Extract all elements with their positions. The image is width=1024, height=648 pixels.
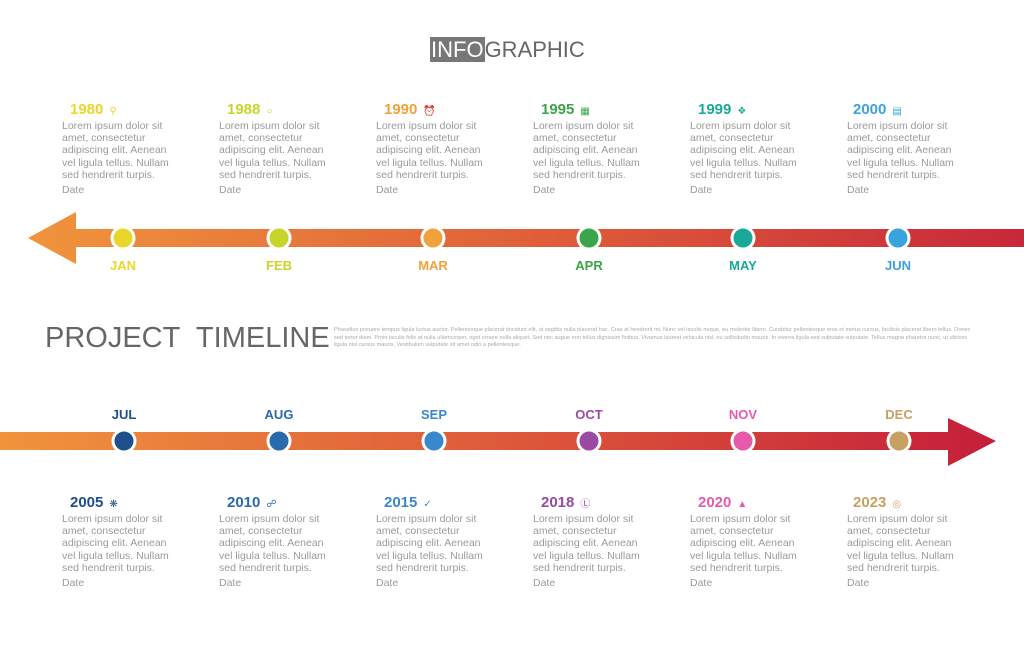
text: Date [219,577,241,589]
text: Date [219,184,241,196]
top text blocks [62,101,954,196]
text: 2018 Ⓛ [541,494,590,511]
text: adipiscing elit. Aenean [847,144,952,156]
text: amet, consectetur [62,525,145,537]
text: Date [847,577,869,589]
text: 1988 ○ [227,101,272,118]
text: sed hendrerit turpis. [847,169,940,181]
bottom text blocks [62,494,954,589]
text: 1990 ⏰ [384,101,436,118]
text: 2005 ❋ [70,494,118,511]
text: sed hendrerit turpis. [376,562,469,574]
text: vel ligula tellus. Nullam [690,550,797,562]
text: adipiscing elit. Aenean [376,144,480,156]
text: adipiscing elit. Aenean [690,537,794,549]
small paragraph: Phasellus posuere tempus ligula luctus auctor. Pellentesque placerat tincidunt elit, ut sagittis nulla placerat hac. Cras at hendrerit mi. Nunc vel iaculis neque, eu molestie libero. Curabitur pellentesque eros et metus cursus, facilisis placerat libero tellus. Donec sed tortor diam. Proin iaculis felis at nulla ullamcorper, eget ornare nulla aliquet. Sed nec augue non tellus dignissim finibus. Vivamus laoreet vehicula nisl, eu sollicitudin mauris. In viverra ligula sed vulputate vulputate. Tellus magna pharetra nunc, ut ultrices ligula nisl cursus mauris. Vestibulum vulputate sit amet odio a pellentesque. [334,327,970,348]
text: DEC [885,407,913,422]
text: Lorem ipsum dolor sit [62,513,162,525]
text: amet, consectetur [690,525,773,537]
text: Lorem ipsum dolor sit [533,513,633,525]
text: adipiscing elit. Aenean [376,537,480,549]
title: INFOGRAPHIC [431,37,585,62]
text: Date [62,184,84,196]
text: Date [847,184,869,196]
text: NOV [729,407,757,422]
text: amet, consectetur [690,132,773,144]
text: AUG [265,407,293,422]
text: Lorem ipsum dolor sit [847,513,947,525]
text: OCT [575,407,603,422]
text: 2023 ◎ [853,494,901,511]
text: vel ligula tellus. Nullam [847,550,954,562]
text: Lorem ipsum dolor sit [690,513,790,525]
text: amet, consectetur [847,132,930,144]
text: sed hendrerit turpis. [62,169,155,181]
text: 1980 ⚲ [70,101,117,118]
text: vel ligula tellus. Nullam [847,157,954,169]
text: adipiscing elit. Aenean [847,537,952,549]
text: Lorem ipsum dolor sit [376,513,476,525]
text: amet, consectetur [219,525,302,537]
text: vel ligula tellus. Nullam [376,157,483,169]
text: sed hendrerit turpis. [847,562,940,574]
text: vel ligula tellus. Nullam [533,157,640,169]
text: adipiscing elit. Aenean [219,537,324,549]
text: APR [575,258,603,273]
text: sed hendrerit turpis. [690,169,783,181]
text: 2010 ☍ [227,494,277,511]
text: Date [690,577,712,589]
text: Date [533,184,555,196]
text: amet, consectetur [533,132,616,144]
text: vel ligula tellus. Nullam [219,550,326,562]
text: 2020 ▲ [698,494,747,511]
text: sed hendrerit turpis. [219,169,312,181]
text: adipiscing elit. Aenean [690,144,794,156]
text: vel ligula tellus. Nullam [690,157,797,169]
text: Lorem ipsum dolor sit [62,120,162,132]
text: amet, consectetur [376,132,459,144]
text: adipiscing elit. Aenean [533,537,638,549]
text: Lorem ipsum dolor sit [376,120,476,132]
text: vel ligula tellus. Nullam [533,550,640,562]
text: amet, consectetur [62,132,145,144]
text: MAY [729,258,757,273]
text: Lorem ipsum dolor sit [690,120,790,132]
text: SEP [421,407,447,422]
text: Date [690,184,712,196]
text: 1999 ❖ [698,101,746,118]
text: adipiscing elit. Aenean [62,144,166,156]
text: vel ligula tellus. Nullam [219,157,326,169]
text: Date [62,577,84,589]
text: sed hendrerit turpis. [533,562,626,574]
text: 1995 ▦ [541,101,590,118]
text: adipiscing elit. Aenean [62,537,166,549]
text: sed hendrerit turpis. [533,169,626,181]
text: amet, consectetur [533,525,616,537]
text: Date [376,184,398,196]
text: sed hendrerit turpis. [219,562,312,574]
text: amet, consectetur [219,132,302,144]
month labels [110,258,913,422]
text: JUL [112,407,136,422]
heading: project timeline: PROJECT TIMELINE [45,322,330,354]
text: FEB [266,258,292,273]
text: sed hendrerit turpis. [62,562,155,574]
text: vel ligula tellus. Nullam [376,550,483,562]
text: MAR [418,258,448,273]
text: Lorem ipsum dolor sit [847,120,947,132]
text: Lorem ipsum dolor sit [533,120,633,132]
text: Date [533,577,555,589]
text: Lorem ipsum dolor sit [219,120,319,132]
text: sed hendrerit turpis. [690,562,783,574]
text: Date [376,577,398,589]
text: amet, consectetur [847,525,930,537]
text: 2000 ▤ [853,101,902,118]
text: sed hendrerit turpis. [376,169,469,181]
text: adipiscing elit. Aenean [219,144,324,156]
text: amet, consectetur [376,525,459,537]
text: vel ligula tellus. Nullam [62,550,169,562]
text: 2015 ✓ [384,494,432,511]
text: vel ligula tellus. Nullam [62,157,169,169]
text: JAN [110,258,136,273]
text: Lorem ipsum dolor sit [219,513,319,525]
text: JUN [885,258,911,273]
text: adipiscing elit. Aenean [533,144,638,156]
